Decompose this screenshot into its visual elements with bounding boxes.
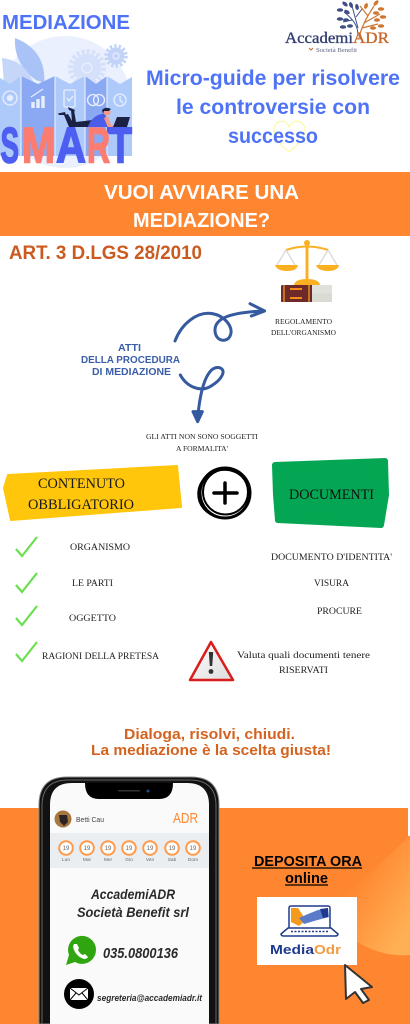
heading: mediazione: MEDIAZIONE xyxy=(2,11,130,34)
phone mockup xyxy=(39,777,219,1024)
calendar strip: 19 xyxy=(190,846,197,852)
panel icons xyxy=(3,89,126,108)
panel: documenti: DOCUMENTI xyxy=(289,487,374,503)
text: atti della procedura: DELLA PROCEDURA xyxy=(81,354,180,366)
logo: mediaodr: Odr xyxy=(314,943,341,957)
icon: email xyxy=(64,979,94,1009)
note: documenti riservati: RISERVATI xyxy=(279,665,328,675)
word: smart: S xyxy=(0,118,19,174)
calendar strip: Gio xyxy=(125,857,133,863)
calendar strip: Ven xyxy=(146,857,154,863)
calendar strip: 19 xyxy=(84,846,91,852)
calendar strip: 19 xyxy=(63,846,70,852)
logo: AccademiADR: ADR xyxy=(353,30,390,47)
arrow: to regolamento xyxy=(175,304,265,341)
person with laptop xyxy=(58,107,132,134)
calendar strip: 19 xyxy=(169,846,176,852)
panels xyxy=(0,76,132,160)
calendar strip: Sab xyxy=(168,857,177,863)
icon: leaves xyxy=(2,38,44,84)
list: documenti: VISURA xyxy=(314,578,350,588)
label: gli atti: GLI ATTI NON SONO SOGGETTI xyxy=(146,432,258,441)
calendar strip: Dom xyxy=(188,857,198,863)
slogan: La mediazione è la scelta giusta! xyxy=(91,742,331,759)
list: documenti xyxy=(271,552,392,616)
logo: AccademiADR xyxy=(285,0,390,54)
check: ragioni xyxy=(16,642,37,661)
call to action: deposita ora online xyxy=(252,854,363,887)
arrow: to formalita xyxy=(180,367,223,422)
list: documenti: PROCURE xyxy=(317,606,363,616)
logo: AccademiADR: Accademi xyxy=(285,30,354,47)
text: atti della procedura: DI MEDIAZIONE xyxy=(92,366,171,378)
phone header: Betti Cau xyxy=(76,815,104,824)
check: oggetto xyxy=(16,606,37,625)
illustration: smart mediation xyxy=(0,36,132,174)
title: micro-guide: Micro-guide per risolvere xyxy=(146,67,400,90)
check: organismo xyxy=(16,537,37,556)
calendar strip: Mer xyxy=(104,857,113,863)
company name xyxy=(77,886,190,920)
calendar strip xyxy=(50,833,209,868)
slogan xyxy=(91,726,331,759)
company name: AccademiADR xyxy=(90,886,176,902)
text: atti della procedura: ATTI xyxy=(118,342,141,354)
icon: plus in scribbled circle xyxy=(198,468,250,518)
panel: contenuto obbligatorio xyxy=(4,466,181,520)
label: gli atti xyxy=(146,432,258,453)
note: documenti riservati xyxy=(237,651,370,675)
logo: mediaodr: Media xyxy=(270,943,315,957)
word: smart: R xyxy=(87,118,110,174)
checklist: contenuto xyxy=(16,537,160,661)
icon: scales on books xyxy=(275,240,339,302)
logo: mediaodr xyxy=(257,897,357,965)
icon: tree xyxy=(337,0,386,38)
phone header xyxy=(54,810,198,828)
banner: vuoi avviare una mediazione: VUOI AVVIARE UNA xyxy=(104,182,299,204)
title: micro-guide: successo xyxy=(228,125,318,148)
phone header: ADR xyxy=(173,811,198,827)
word: smart: M xyxy=(22,118,55,174)
list: documenti: DOCUMENTO D'IDENTITA' xyxy=(271,552,392,562)
label: regolamento: DELL'ORGANISMO xyxy=(271,328,337,337)
title: micro-guide: le controversie con xyxy=(176,96,370,119)
items: OGGETTO xyxy=(69,613,117,623)
calendar strip: 19 xyxy=(126,846,133,852)
icon: warning triangle xyxy=(190,642,233,680)
word: smart: A xyxy=(56,118,86,174)
slogan: Dialoga, risolvi, chiudi. xyxy=(124,726,295,743)
icon: gears xyxy=(71,46,126,84)
icon: mouse cursor xyxy=(345,965,372,1003)
label: gli atti: A FORMALITA' xyxy=(176,444,229,453)
note: documenti riservati: Valuta quali documenti tenere xyxy=(237,651,370,661)
word: smart xyxy=(0,118,132,174)
calendar strip: Lun xyxy=(62,857,70,863)
icon: laptop handshake xyxy=(281,906,338,936)
company name: Società Benefit srl xyxy=(77,904,190,920)
items xyxy=(42,542,160,661)
label: regolamento: REGOLAMENTO xyxy=(275,317,333,326)
call to action: deposita ora online: online xyxy=(285,871,328,887)
panel: contenuto obbligatorio: OBBLIGATORIO xyxy=(28,497,134,513)
logo: AccademiADR: Società Benefit xyxy=(316,47,357,54)
panel: orange footer xyxy=(0,808,410,1024)
word: smart: T xyxy=(109,118,132,174)
items: RAGIONI DELLA PRETESA xyxy=(42,651,160,661)
heading: art. 3: ART. 3 D.LGS 28/2010 xyxy=(9,243,202,264)
check: le parti xyxy=(16,573,37,592)
title: micro-guide xyxy=(146,67,400,148)
calendar strip: 19 xyxy=(105,846,112,852)
panel: documenti xyxy=(275,461,386,525)
banner: vuoi avviare una mediazione xyxy=(0,172,410,236)
call to action: deposita ora online: DEPOSITA ORA xyxy=(254,854,363,870)
email address: segreteria@accademiadr.it xyxy=(97,993,203,1003)
calendar strip: 19 xyxy=(147,846,154,852)
icon: yellow heart outline xyxy=(274,121,305,152)
text: atti della procedura xyxy=(81,342,180,378)
calendar strip: Mar xyxy=(83,857,92,863)
panel: contenuto obbligatorio: CONTENUTO xyxy=(38,476,125,492)
banner: vuoi avviare una mediazione: MEDIAZIONE? xyxy=(133,210,270,232)
icon: whatsapp xyxy=(66,936,96,965)
items: ORGANISMO xyxy=(70,542,131,552)
label: regolamento xyxy=(271,317,337,337)
items: LE PARTI xyxy=(72,578,113,588)
phone number: 035.0800136 xyxy=(103,946,179,962)
